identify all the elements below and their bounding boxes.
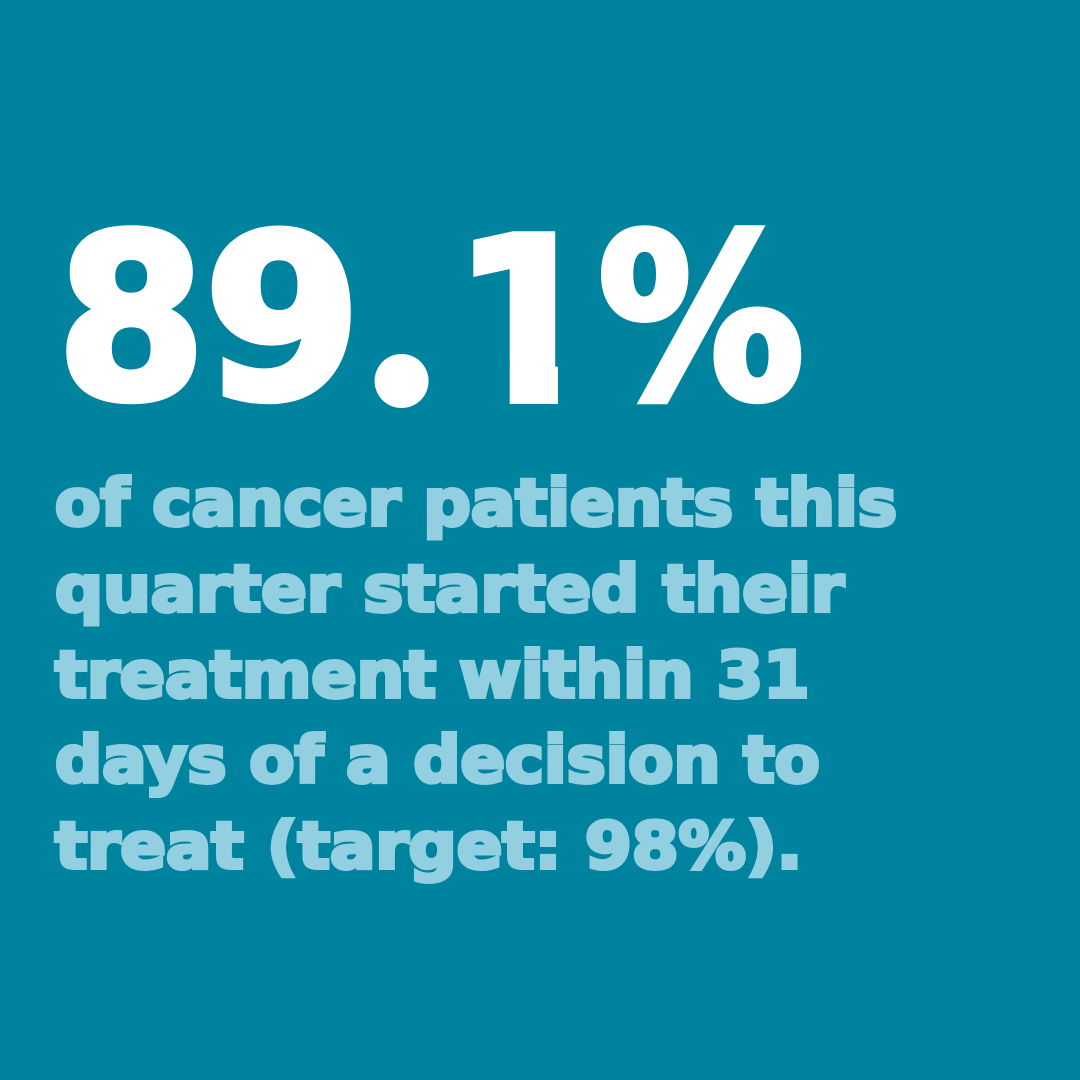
- description text: [54, 467, 897, 884]
- description text: of cancer patients this: [55, 467, 897, 541]
- description text: quarter started their: [55, 553, 844, 627]
- headline statistic: 1: [453, 191, 602, 454]
- description text: treat (target: 98%).: [55, 810, 802, 884]
- headline statistic: [57, 188, 804, 451]
- headline statistic: 9: [204, 188, 361, 451]
- headline statistic: .: [359, 193, 444, 456]
- headline statistic: %: [598, 188, 804, 451]
- description text: treatment within 31: [55, 638, 810, 712]
- description text: days of a decision to: [55, 724, 820, 798]
- headline statistic: 8: [57, 188, 206, 451]
